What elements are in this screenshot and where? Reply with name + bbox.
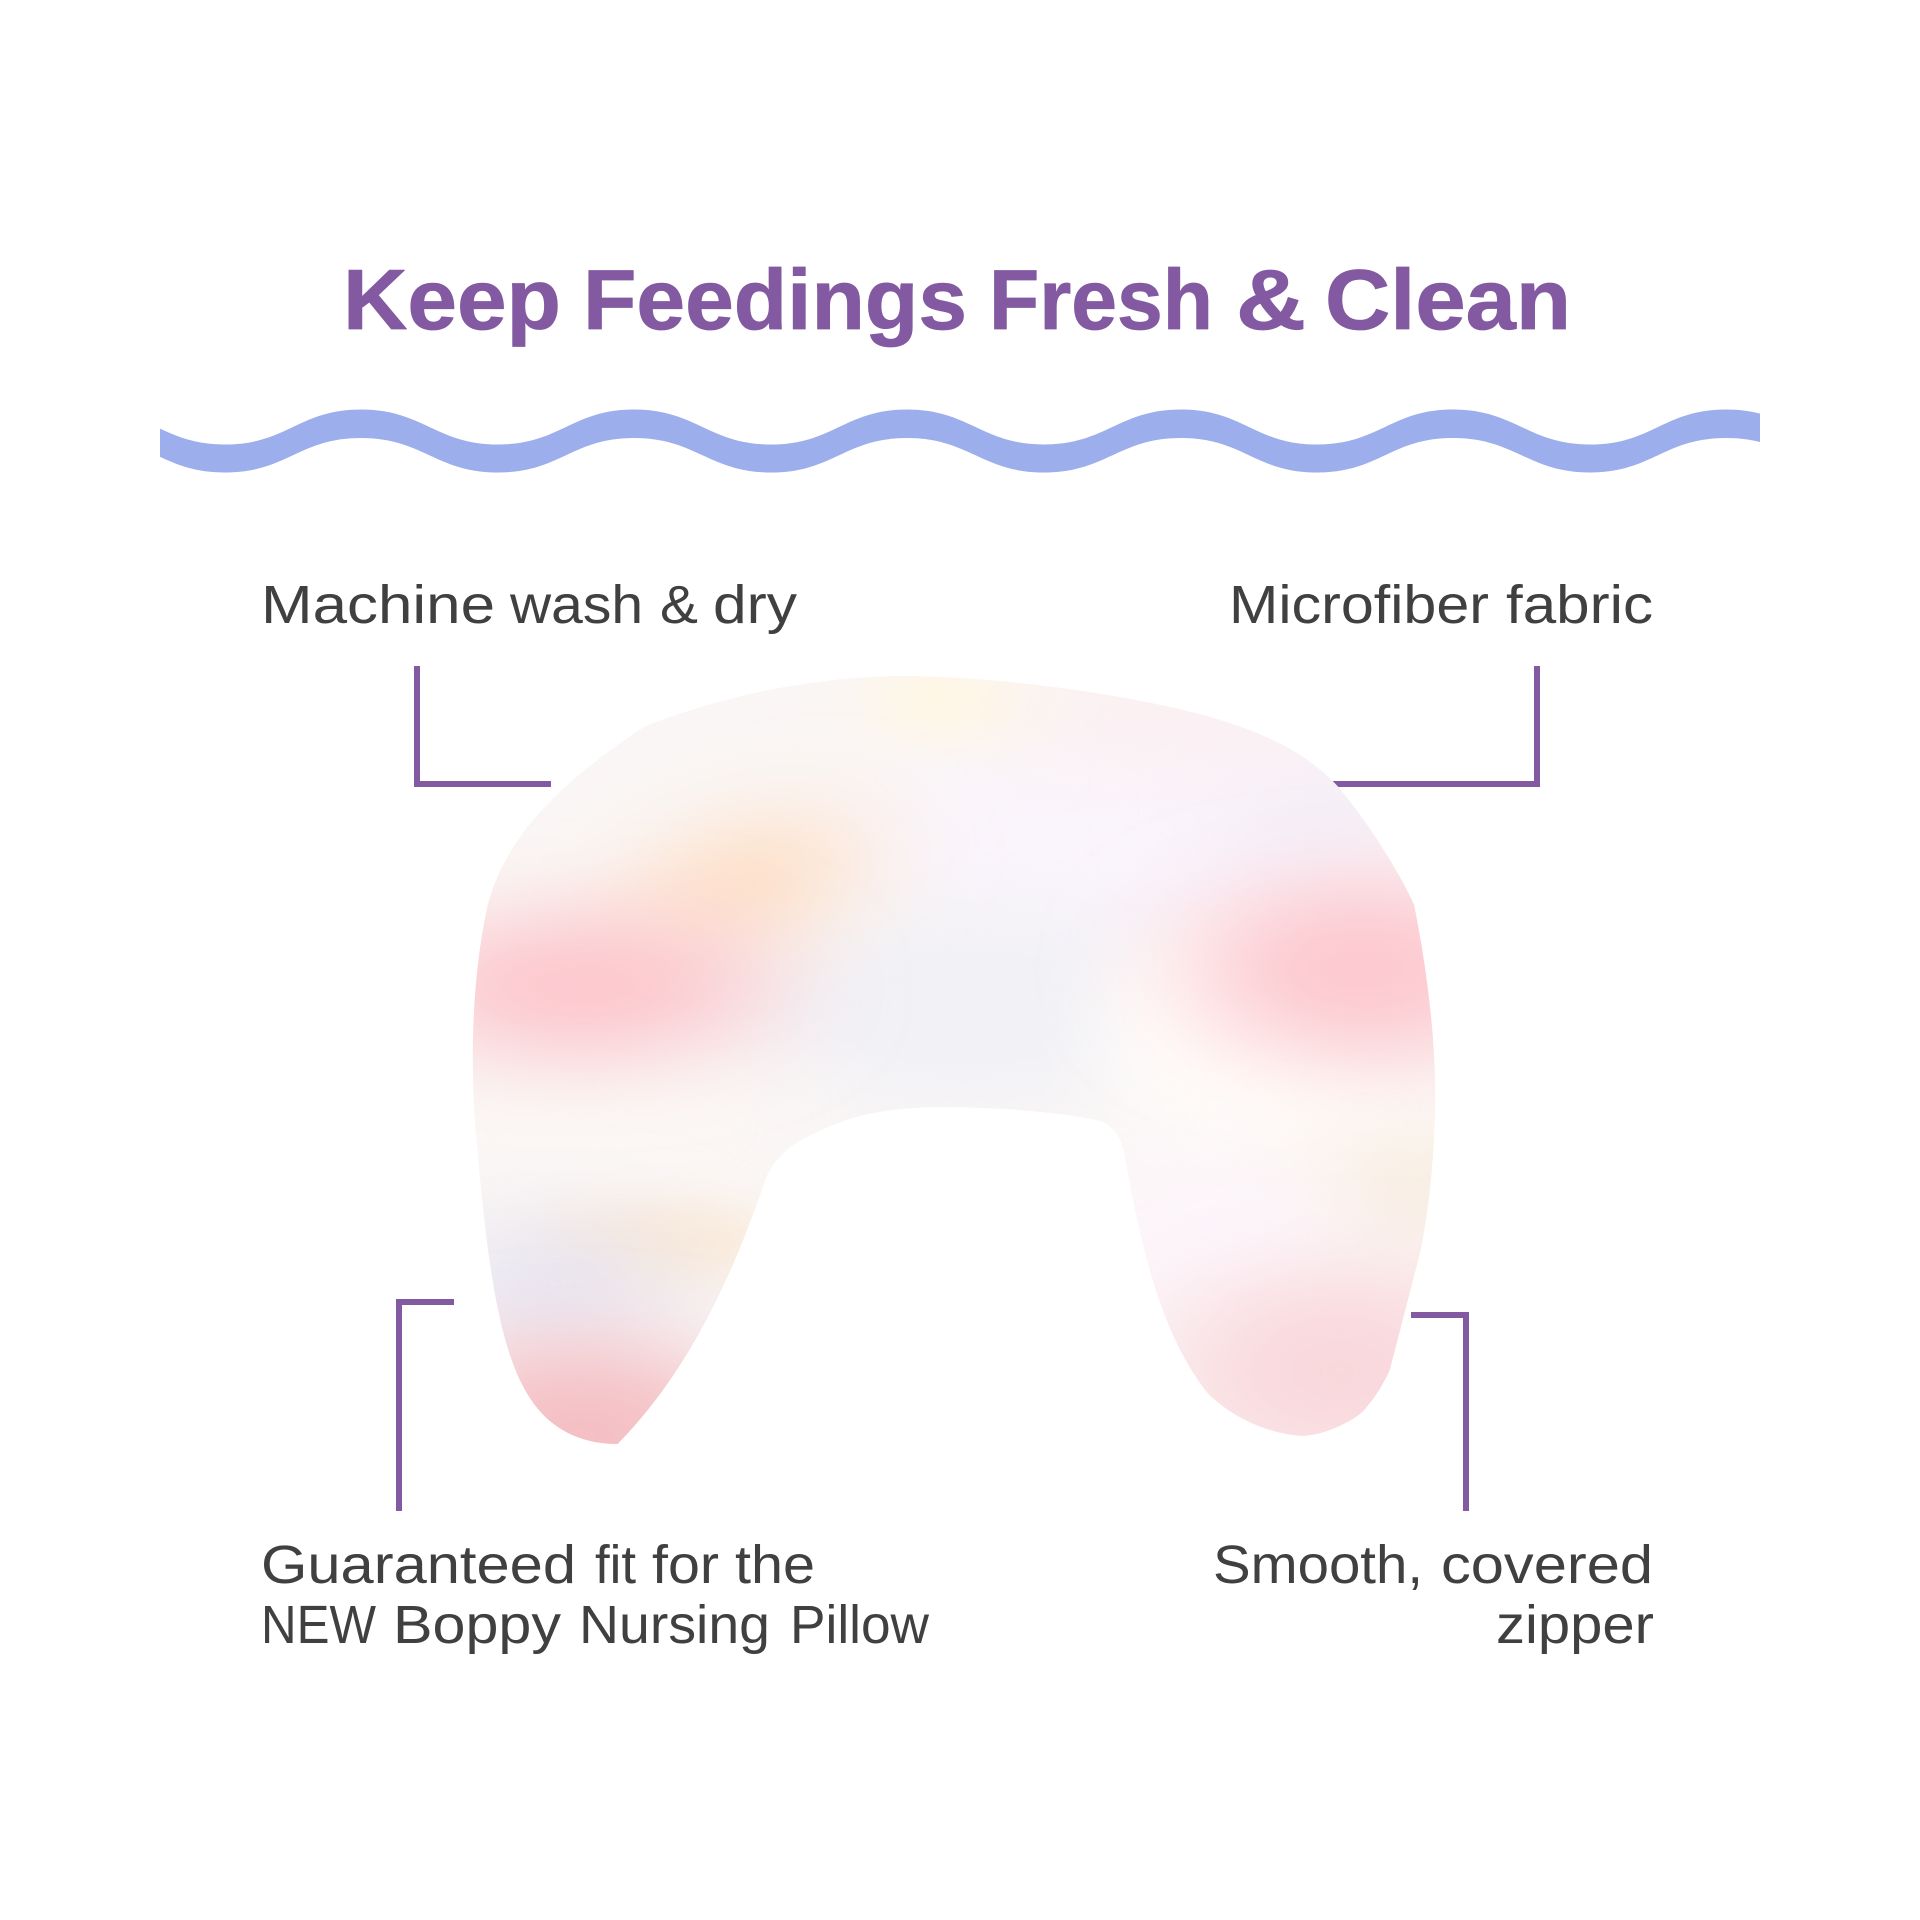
label: guaranteed fit: the xyxy=(735,1535,815,1595)
label: machine wash and dry: & xyxy=(660,575,698,635)
connector: bottom left bracket xyxy=(399,1302,454,1511)
title: & xyxy=(1236,253,1306,348)
label: guaranteed fit: Pillow xyxy=(790,1595,930,1655)
label: microfiber fabric: Microfiber xyxy=(1229,575,1489,635)
connector: top right bracket xyxy=(1333,666,1537,784)
label: smooth covered zipper xyxy=(1213,1535,1654,1655)
label: smooth covered zipper: covered xyxy=(1441,1535,1653,1595)
label: smooth covered zipper: zipper xyxy=(1496,1595,1654,1655)
label: smooth covered zipper: Smooth, xyxy=(1213,1535,1423,1595)
label: guaranteed fit: fit xyxy=(595,1535,636,1595)
connector: top left bracket xyxy=(417,666,551,784)
title xyxy=(343,253,1571,348)
title: Feedings xyxy=(583,253,967,348)
label: guaranteed fit: Nursing xyxy=(579,1595,770,1655)
label: guaranteed fit xyxy=(261,1535,930,1655)
label: guaranteed fit: NEW xyxy=(261,1595,376,1655)
title: Keep xyxy=(343,253,561,348)
label: microfiber fabric: fabric xyxy=(1506,575,1653,635)
label: guaranteed fit: for xyxy=(652,1535,719,1595)
wavy divider xyxy=(88,410,1863,472)
label: machine wash and dry: dry xyxy=(713,575,797,635)
label: machine wash and dry: Machine xyxy=(261,575,495,635)
label: microfiber fabric xyxy=(1229,575,1653,635)
label: machine wash and dry xyxy=(261,575,797,635)
nursing pillow cover illustration xyxy=(472,676,1435,1444)
title: Clean xyxy=(1325,253,1571,348)
title: Fresh xyxy=(989,253,1213,348)
connector: bottom right bracket xyxy=(1411,1315,1466,1511)
label: guaranteed fit: Guaranteed xyxy=(261,1535,576,1595)
label: guaranteed fit: Boppy xyxy=(393,1595,561,1655)
label: machine wash and dry: wash xyxy=(509,575,643,635)
